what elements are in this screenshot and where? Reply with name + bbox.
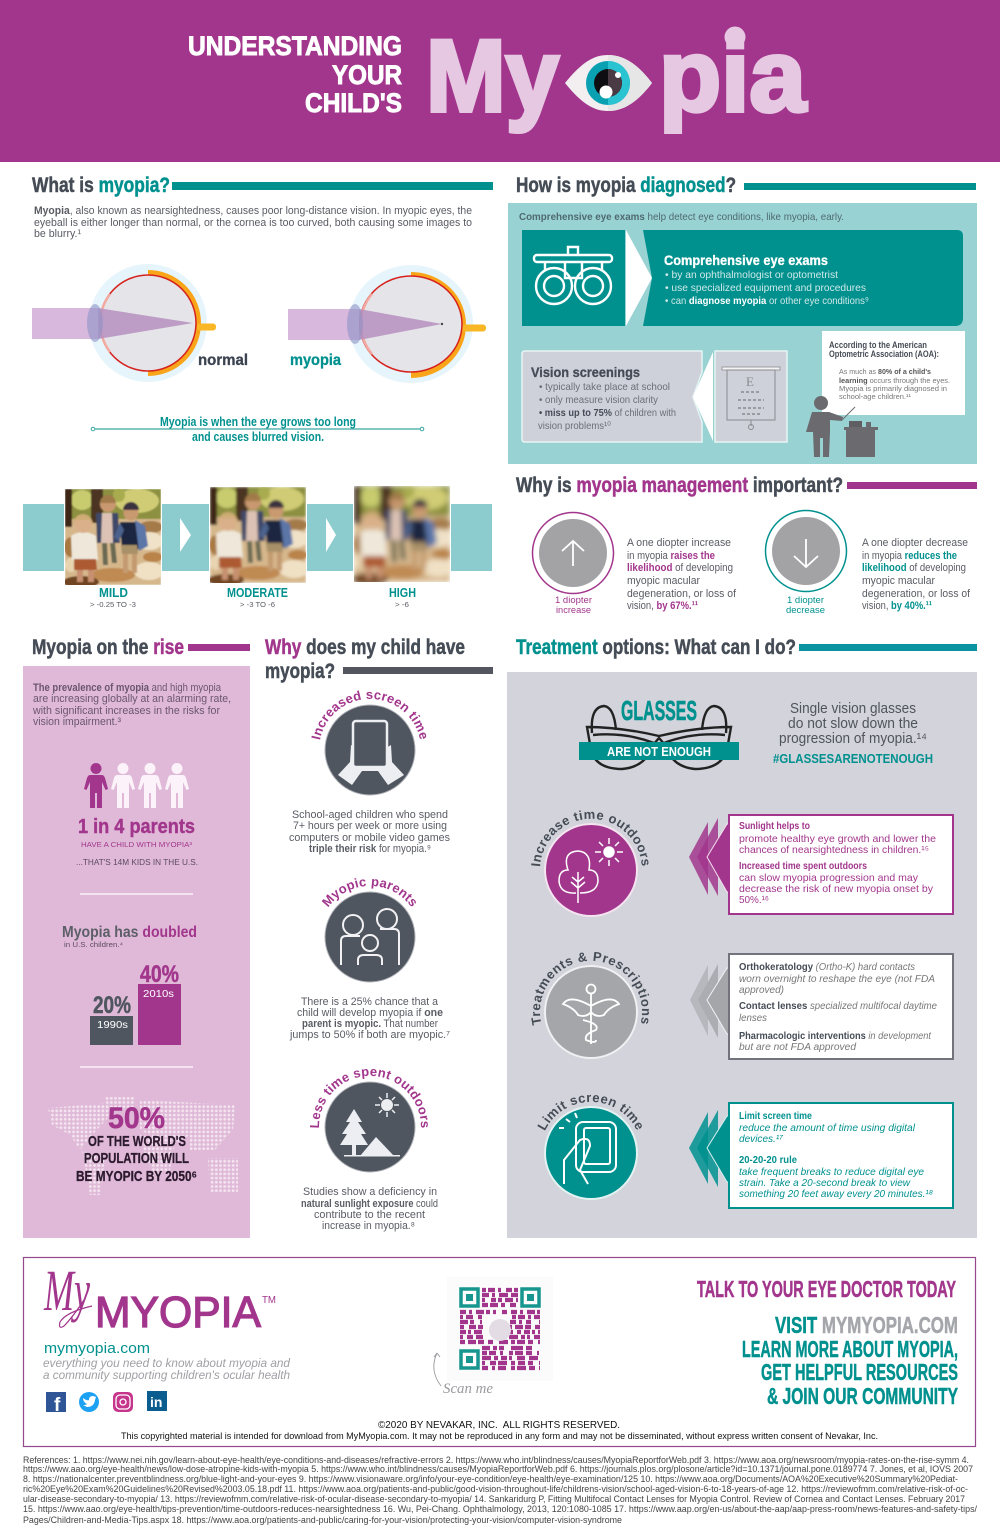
- treatment: limit screen time: [537, 1094, 642, 1200]
- diagram: normal eye: [32, 264, 216, 382]
- bar chart: 1990s vs 2010s: 40%: [140, 961, 179, 988]
- callout: AOA quote: As much as 80% of a child's: [839, 367, 931, 376]
- icon: caduceus: [563, 984, 619, 1044]
- label: moderate: > -3 TO -6: [240, 600, 275, 609]
- cause: less time spent outdoors: [310, 1069, 428, 1172]
- cause: less time spent outdoors: Less time spent outdoors: [310, 1069, 428, 1128]
- text: website: a community supporting children's ocular health: [43, 1368, 290, 1382]
- icon: eye chart: E: [746, 374, 754, 389]
- card: prescriptions: lenses: [739, 1012, 768, 1024]
- text: myopia definition: be blurry.¹: [34, 228, 81, 240]
- references: References: 1. https://www.nei.nih.gov/learn-about-eye-health/eye-conditions-and-diseases/refractive-errors 2. https://www.who.int/blindness/causes/MyopiaReportforWeb.pdf 3. https://www.aoa.org/newsroom/myopia-rates-on-the-rise-symm 4.: [23, 1455, 969, 1465]
- chevrons: gray: [690, 964, 731, 1038]
- callout: AOA quote: [822, 331, 965, 415]
- references: [23, 1455, 977, 1525]
- card: screen time: [729, 1103, 953, 1208]
- photo: high blur: [352, 485, 453, 585]
- card: screen time: something 20 feet away every 20 minutes.¹⁸: [739, 1188, 933, 1200]
- text: prevalence: are increasing globally at an alarming rate,: [33, 693, 231, 705]
- references: 15. https://www.aao.org/eye-health/tips-prevention/time-outdoors-reduces-nearsightedness 16. Wu, Pei-Chang. Ophthalmology, 2013, 120:1080-1085 17. https://www.aap.org/en-us/about-the-aap/aap-press-room/news-features-and-safety-tips/: [23, 1504, 977, 1514]
- strip: blur progression: [23, 485, 492, 588]
- card: sunlight: chances of nearsightedness in children.¹⁵: [739, 844, 929, 856]
- text: glasses do not slow progression: progression of myopia.¹⁴: [779, 731, 927, 747]
- card: sunlight: [729, 815, 953, 914]
- text: myopia definition: [34, 205, 472, 240]
- icon: tree and sun: [559, 838, 623, 903]
- text: myopia definition: eyeball is either longer than normal, or the cornea is too curved, both causing some images to: [34, 217, 472, 229]
- stat: one in four parents: [76, 816, 198, 867]
- card: prescriptions: approved): [739, 984, 784, 996]
- heading: myopia on the rise: Myopia on the rise: [32, 636, 184, 659]
- text: glasses do not slow progression: [773, 701, 933, 766]
- text: increase risk: myopic macular: [627, 575, 700, 587]
- cause: myopic parents: Myopic parents: [322, 878, 416, 907]
- icon: eye as letter o: [565, 55, 652, 111]
- stat: myopia has doubled: Myopia has doubled: [62, 924, 197, 941]
- text: increase risk: A one diopter increase: [627, 537, 731, 549]
- card: sunlight: 50%.¹⁶: [739, 894, 769, 906]
- text: parents risk: child will develop myopia if one: [297, 1007, 443, 1019]
- callout: AOA quote: Optometric Association (AOA):: [829, 349, 939, 360]
- stat: myopia has doubled: in U.S. children.⁴: [64, 940, 123, 949]
- chevrons: teal: [689, 1110, 731, 1187]
- logo: my myopia: My: [43, 1258, 90, 1323]
- icon: linkedin: in: [150, 1394, 162, 1410]
- text: decrease risk: myopic macular: [862, 575, 935, 587]
- text: decrease risk: A one diopter decrease: [862, 537, 968, 549]
- panel: myopia on the rise: [23, 666, 250, 1238]
- stat: one in four parents: HAVE A CHILD WITH MYOPIA³: [81, 840, 193, 849]
- treatment: increase time outdoors: Increase time outdoors: [531, 810, 648, 866]
- annotation: scan me: [434, 1353, 493, 1397]
- title: pia: pia: [659, 19, 807, 133]
- card: screen time: Limit screen time: [739, 1110, 812, 1122]
- arrow: moderate to high: [326, 518, 336, 552]
- text: website: mymyopia.com: [44, 1340, 150, 1357]
- stat: fifty percent by 2050: OF THE WORLD'S: [88, 1133, 186, 1150]
- card: prescriptions: Pharmacologic interventions in development: [739, 1030, 932, 1042]
- icon: one diopter increase: increase: [556, 605, 591, 616]
- icon: four parents one highlighted: [84, 763, 189, 808]
- heading: what is myopia: What is myopia?: [32, 174, 170, 197]
- label: high: [389, 586, 416, 609]
- icon: instagram: [113, 1392, 133, 1412]
- callout: AOA quote: Myopia is primarily diagnosed in: [839, 384, 947, 393]
- logo: my myopia: [43, 1258, 276, 1337]
- text: increase risk: in myopia raises the: [627, 550, 715, 562]
- card: sunlight: promote healthy eye growth and lower the: [739, 833, 936, 845]
- text: glasses do not slow progression: #GLASSESARENOTENOUGH: [773, 751, 933, 766]
- heading: why does my child have myopia: myopia?: [265, 660, 335, 683]
- icon: one diopter decrease: decrease: [786, 605, 825, 616]
- text: decrease risk: degeneration, or loss of: [862, 588, 971, 600]
- card: comprehensive eye exams: [643, 230, 963, 326]
- card: vision screenings: • typically take place at school: [539, 381, 670, 393]
- label: moderate: MODERATE: [227, 586, 288, 600]
- icon: glasses are not enough: GLASSES: [621, 695, 697, 726]
- text: prevalence: The prevalence of myopia and high myopia: [33, 682, 222, 694]
- card: sunlight: Increased time spent outdoors: [739, 860, 867, 872]
- text: sunlight deficiency: contribute to the recent: [314, 1209, 425, 1221]
- title: My: My: [426, 19, 559, 133]
- icon: eye chart: [693, 351, 787, 442]
- panel: diagnosis: [508, 203, 977, 464]
- text: increase risk: degeneration, or loss of: [627, 588, 737, 600]
- bar chart: 1990s vs 2010s: [90, 961, 181, 1045]
- icon: teacher at desk: [806, 396, 878, 457]
- QR code: [447, 1277, 553, 1381]
- icon: glasses are not enough: [579, 695, 739, 769]
- text: website: [43, 1340, 290, 1382]
- icons: social media: [46, 1391, 167, 1416]
- label: mild: [90, 586, 136, 609]
- arrow: mild to moderate: [180, 518, 191, 552]
- text: decrease risk: [862, 537, 971, 612]
- card: screen time: devices.¹⁷: [739, 1133, 784, 1145]
- icon box: phoropter: [522, 230, 652, 326]
- references: 8. https://nationalcenter.preventblindness.org/blue-light-and-your-eyes 9. https://www.visionaware.org/info/your-eye-condition/eye-health/eye-examination/125 10. https://www.aoa.org/Documents/AOA%20Executive%20Summary%20Pediat-: [23, 1474, 958, 1484]
- card: vision screenings: Vision screenings: [531, 364, 640, 380]
- label: moderate: [227, 586, 288, 609]
- header banner: [0, 0, 1000, 162]
- label: mild: > -0.25 TO -3: [90, 600, 136, 609]
- photo: mild blur: [63, 488, 164, 588]
- stat: myopia has doubled: [62, 924, 197, 949]
- card: comprehensive eye exams: • by an ophthalmologist or optometrist: [665, 269, 838, 281]
- card: screen time: 20-20-20 rule: [739, 1154, 797, 1166]
- stat: one in four parents: 1 in 4 parents: [78, 816, 195, 838]
- text: parents risk: parent is myopic. That number: [302, 1018, 438, 1030]
- map: world dots: [48, 1097, 238, 1195]
- text: copyright: ©2020 BY NEVAKAR, INC. ALL RIGHTS RESERVED.: [378, 1419, 620, 1431]
- text: screen time risk: School-aged children who spend: [292, 809, 448, 821]
- icon: tree sun mountain: [340, 1093, 400, 1156]
- cause: myopic parents: [322, 878, 416, 982]
- icon: one diopter increase: 1 diopter: [555, 595, 592, 606]
- card: vision screenings: • miss up to 75% of children with: [539, 407, 676, 419]
- text: website: everything you need to know about myopia and: [43, 1356, 290, 1370]
- card: sunlight: Sunlight helps to: [739, 820, 810, 832]
- card: prescriptions: Contact lenses specialized multifocal daytime: [739, 1000, 937, 1012]
- title: understanding your child's: [188, 31, 402, 118]
- icon: family: [341, 909, 399, 965]
- text: sunlight deficiency: [301, 1186, 438, 1232]
- text: decrease risk: in myopia reduces the: [862, 550, 957, 562]
- text: glasses do not slow progression: Single vision glasses: [790, 701, 916, 717]
- text: screen time risk: computers or mobile video games: [289, 832, 450, 844]
- card: prescriptions: worn overnight to reshape the eye (not FDA: [739, 973, 935, 985]
- title: understanding your child's: UNDERSTANDING: [188, 31, 402, 61]
- stat: fifty percent by 2050: 50%: [108, 1102, 165, 1135]
- card: screen time: reduce the amount of time using digital: [739, 1122, 916, 1134]
- title: understanding your child's: CHILD'S: [305, 88, 402, 118]
- cause: increased screen time: [311, 690, 426, 796]
- panel: treatment options: [507, 672, 977, 1238]
- text: screen time risk: triple their risk for myopia.⁹: [309, 843, 431, 855]
- heading: why does my child have myopia: [265, 636, 493, 683]
- annotation: scan me: Scan me: [443, 1381, 493, 1397]
- text: myopia definition: Myopia, also known as nearsightedness, causes poor long-distance vision. In myopic eyes, the: [34, 205, 472, 217]
- card: comprehensive eye exams: Comprehensive eye exams: [664, 252, 828, 268]
- references: ric%20Eye%20Exam%20Guidelines%20Revised%2003.05.18.pdf 11. https://www.aoa.org/patients-and-public/good-vision-throughout-life/childrens-vision/school-aged-vision-6-to-18-years-of-age 12. https://reviewofmm.com/relative-risk-of-oc-: [23, 1484, 968, 1494]
- stat: fifty percent by 2050: POPULATION WILL: [84, 1150, 189, 1167]
- heading: how is myopia diagnosed: [516, 174, 976, 197]
- stat: one in four parents: ...THAT'S 14M KIDS IN THE U.S.: [76, 858, 198, 867]
- text: copyright: This copyrighted material is intended for download from MyMyopia.com. It may not be reproduced in any form and may not be disseminated, without express written consent of Nevakar, Inc.: [121, 1431, 878, 1441]
- references: https://www.aao.org/eye-health/news/low-dose-atropine-kids-with-myopia 5. https://www.who.int/blindness/causes/MyopiaReportforWeb.pdf 6. https://journals.plos.org/plosone/article?id=10.1371/journal.pone.0189774 7. Jones, et al, IOVS 2007: [23, 1464, 973, 1474]
- logo: my myopia: TM: [262, 1295, 276, 1306]
- heading: why does my child have myopia: Why does my child have: [265, 636, 465, 659]
- label: mild: MILD: [99, 586, 128, 600]
- icon: one diopter decrease: [766, 510, 846, 616]
- card: screen time: take frequent breaks to reduce digital eye: [739, 1166, 924, 1178]
- card: prescriptions: [729, 954, 953, 1059]
- text: increase risk: likelihood of developing: [627, 562, 733, 574]
- text: screen time risk: [289, 809, 450, 855]
- text: screen time risk: 7+ hours per week or more using: [293, 820, 447, 832]
- icon: one diopter increase: [532, 512, 614, 616]
- footer panel: [24, 1258, 976, 1446]
- chevrons: purple: [689, 818, 731, 896]
- text: parents risk: There is a 25% chance that a: [301, 996, 439, 1008]
- references: ular-disease-secondary-to-myopia/ 13. https://reviewofmm.com/relative-risk-of-ocular-disease-secondary-to-myopia/ 14. Sankaridurg P, Fitting Multifocal Contact Lenses for Myopia Control. Review of Cornea and Contact Lenses. February 2017: [23, 1494, 965, 1504]
- text: glasses do not slow progression: do not slow down the: [788, 716, 918, 732]
- label: normal: normal: [198, 352, 248, 369]
- callout: AOA quote: According to the American: [829, 340, 927, 351]
- heading: how is myopia diagnosed: How is myopia diagnosed?: [516, 174, 736, 197]
- references: Pages/Children-and-Media-Tips.aspx 18. https://www.aoa.org/patients-and-public/caring-for-your-vision/protecting-your-vision/computer-vision-syndrome: [23, 1515, 622, 1525]
- callout: myopia definition line: and causes blurred vision.: [192, 430, 324, 444]
- text: copyright: [121, 1419, 878, 1441]
- diagram: myopia eye: [288, 265, 486, 383]
- icon: hand holding phone: [559, 1113, 616, 1184]
- text: decrease risk: likelihood of developing: [862, 562, 966, 574]
- label: myopia: myopia: [290, 352, 341, 369]
- text: sunlight deficiency: natural sunlight exposure could: [301, 1198, 438, 1210]
- callout: AOA quote: learning occurs through the eyes.: [839, 376, 950, 385]
- card: comprehensive eye exams: • can diagnose myopia or other eye conditions⁹: [665, 295, 869, 307]
- bar chart: 1990s vs 2010s: 1990s: [97, 1019, 128, 1031]
- text: sunlight deficiency: increase in myopia.⁸: [322, 1220, 415, 1232]
- card: sunlight: can slow myopia progression and may: [739, 872, 919, 884]
- callout: myopia definition line: Myopia is when the eye grows too long: [160, 415, 356, 429]
- photo: moderate blur: [208, 486, 309, 586]
- icon: tablet in hands: [338, 721, 404, 785]
- text: increase risk: [627, 537, 737, 612]
- callout: AOA quote: school-age children.¹¹: [839, 392, 911, 401]
- text: intro: Comprehensive eye exams help detect eye conditions, like myopia, early.: [519, 211, 844, 223]
- callout: myopia definition line: [91, 415, 424, 444]
- stat: fifty percent by 2050: [76, 1102, 197, 1185]
- card: prescriptions: Orthokeratology (Ortho-K) hard contacts: [739, 961, 916, 973]
- bar chart: 1990s vs 2010s: 2010s: [143, 988, 174, 1000]
- title: understanding your child's: YOUR: [332, 60, 402, 90]
- text: increase risk: vision, by 67%.¹¹: [627, 600, 698, 612]
- card: prescriptions: but are not FDA approved: [739, 1041, 857, 1053]
- text: parents risk: [289, 996, 450, 1041]
- text: decrease risk: vision, by 40%.¹¹: [862, 600, 932, 612]
- treatment: treatments and prescriptions: [531, 952, 650, 1059]
- treatment: increase time outdoors: [531, 810, 648, 917]
- card: vision screenings: • only measure vision clarity: [539, 394, 659, 406]
- icon: one diopter decrease: 1 diopter: [787, 595, 824, 606]
- heading: treatment options: Treatment options: What can I do?: [516, 636, 796, 659]
- treatment: treatments and prescriptions: Treatments & Prescriptions: [531, 952, 650, 1026]
- label: high: HIGH: [389, 586, 416, 600]
- heading: why is myopia management important: Why is myopia management important?: [516, 474, 843, 497]
- text: prevalence: vision impairment.³: [33, 716, 121, 728]
- icon: glasses are not enough: ARE NOT ENOUGH: [607, 744, 711, 759]
- icon: twitter: [79, 1392, 99, 1412]
- heading: what is myopia: [32, 174, 493, 197]
- text: prevalence: with significant increases in the risks for: [32, 705, 220, 717]
- card: sunlight: decrease the risk of new myopia onset by: [739, 883, 934, 895]
- cause: increased screen time: Increased screen time: [311, 690, 426, 740]
- card: comprehensive eye exams: • use specialized equipment and procedures: [665, 282, 866, 294]
- label: high: > -6: [395, 600, 409, 609]
- text: sunlight deficiency: Studies show a deficiency in: [303, 1186, 437, 1198]
- card: vision screenings: vision problems¹⁰: [538, 420, 612, 432]
- stat: fifty percent by 2050: BE MYOPIC BY 2050⁶: [76, 1168, 197, 1185]
- card: vision screenings: [522, 351, 702, 442]
- text: parents risk: jumps to 50% if both are myopic.⁷: [289, 1029, 450, 1041]
- text: prevalence: [32, 682, 231, 728]
- treatment: limit screen time: Limit screen time: [537, 1094, 642, 1130]
- icon: facebook: f: [54, 1395, 61, 1416]
- card: screen time: strain. Take a 20-second break to view: [739, 1177, 911, 1189]
- logo: my myopia: MYOPIA: [95, 1288, 262, 1337]
- call to action: [697, 1276, 958, 1409]
- bar chart: 1990s vs 2010s: 20%: [93, 992, 131, 1019]
